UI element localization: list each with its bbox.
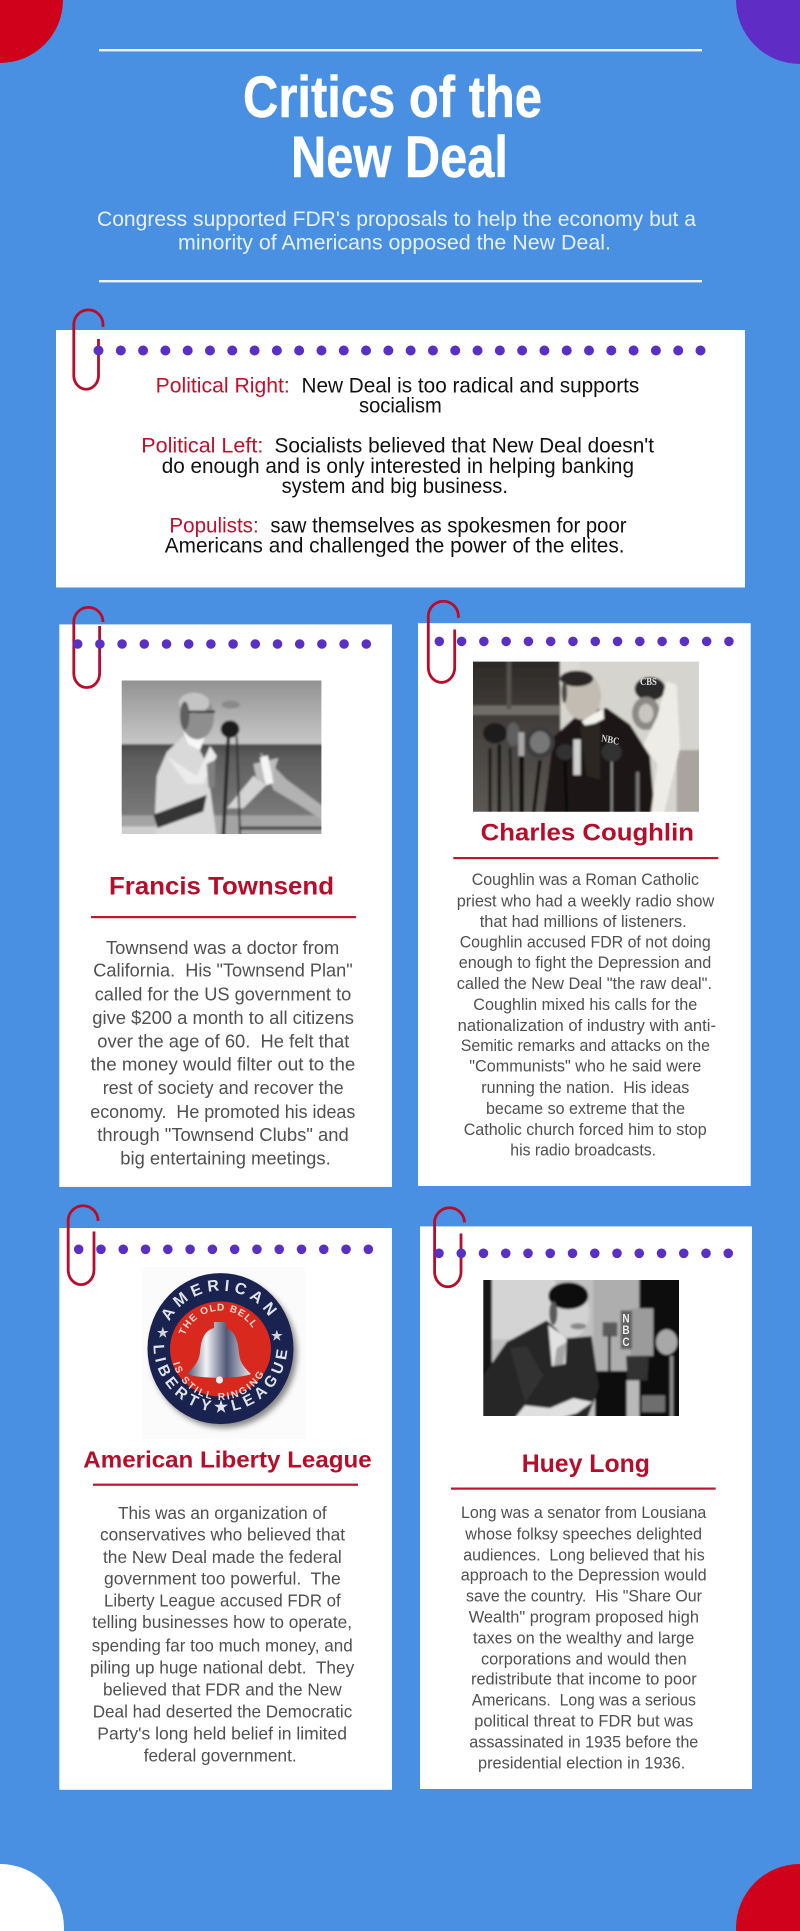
body text: audiences. Long believed that his	[463, 1546, 705, 1564]
title	[243, 65, 542, 190]
photo: Francis Townsend at microphone	[122, 680, 322, 834]
dotted line	[439, 1249, 729, 1258]
photo: Charles Coughlin at radio microphones: NBC	[600, 734, 620, 748]
corner circle: bottom right red	[736, 1864, 800, 1931]
body text: Wealth" program proposed high	[469, 1609, 699, 1627]
text: populists: Americans and challenged the power of the elites.	[165, 535, 625, 558]
heading rule	[451, 1488, 716, 1490]
body text: Coughlin was a Roman Catholic	[472, 871, 699, 889]
heading: Huey Long	[522, 1450, 650, 1478]
body text: telling businesses how to operate,	[92, 1612, 352, 1632]
body text	[90, 937, 355, 1168]
body text: enough to fight the Depression and	[459, 954, 711, 972]
body text: Long was a senator from Lousiana	[461, 1504, 707, 1522]
body text: Townsend was a doctor from	[106, 937, 339, 958]
image: American Liberty League badge: THE OLD BELL	[178, 1304, 256, 1334]
body text: over the age of 60. He felt that	[97, 1030, 349, 1052]
body text: assassinated in 1935 before the	[469, 1734, 698, 1752]
body text: that had millions of listeners.	[480, 913, 687, 931]
corner circle: top left red	[0, 0, 63, 63]
body text: Americans. Long was a serious	[472, 1692, 696, 1710]
icon: paper clip	[68, 1206, 98, 1285]
image: American Liberty League badge: AMERICAN	[162, 1280, 278, 1321]
body text: the money would filter out to the	[91, 1053, 355, 1074]
body text: the New Deal made the federal	[103, 1547, 342, 1567]
panel: political critics overview	[56, 310, 745, 588]
subtitle: Congress supported FDR's proposals to help the economy but a	[97, 208, 696, 231]
text: political left: system and big business.	[282, 475, 508, 498]
photo: Huey Long at NBC microphone: B	[622, 1324, 630, 1337]
text: populists: Populists:	[169, 515, 259, 538]
body text	[457, 871, 716, 1159]
subtitle: minority of Americans opposed the New Deal.	[178, 232, 611, 254]
text: populists	[165, 515, 627, 558]
icon: paper clip	[435, 1208, 464, 1287]
text: political left: do enough and is only interested in helping banking	[162, 455, 634, 478]
body text: spending far too much money, and	[92, 1635, 353, 1655]
body text: Liberty League accused FDR of	[104, 1590, 341, 1610]
body text: whose folksy speeches delighted	[464, 1526, 702, 1544]
body text: conservatives who believed that	[100, 1525, 345, 1545]
body text: save the country. His "Share Our	[466, 1588, 702, 1606]
heading rule	[453, 857, 718, 859]
panel: American Liberty League	[59, 1204, 392, 1790]
heading: Charles Coughlin	[481, 820, 694, 847]
body text: corporations and would then	[481, 1650, 687, 1668]
heading rule	[93, 1484, 358, 1486]
dotted line	[439, 637, 730, 646]
body text: Coughlin accused FDR of not doing	[460, 934, 711, 952]
dotted line	[79, 1245, 369, 1254]
body text: Coughlin mixed his calls for the	[473, 996, 697, 1014]
body text: called for the US government to	[95, 983, 351, 1004]
heading rule	[91, 916, 356, 918]
body text: became so extreme that the	[486, 1100, 685, 1118]
body text: political threat to FDR but was	[474, 1713, 693, 1731]
panel: Huey Long	[420, 1208, 752, 1789]
body text: give $200 a month to all citizens	[92, 1007, 354, 1028]
text: political right	[156, 375, 639, 418]
subtitle	[97, 208, 696, 254]
body text: Deal had deserted the Democratic	[93, 1702, 353, 1722]
body text: Party's long held belief in limited	[97, 1724, 347, 1744]
text: political left: Political Left:	[141, 435, 263, 458]
body text: Catholic church forced him to stop	[464, 1121, 707, 1139]
body text: approach to the Depression would	[461, 1567, 707, 1585]
body text: big entertaining meetings.	[120, 1148, 331, 1168]
body text: nationalization of industry with anti-	[458, 1017, 716, 1035]
dotted line	[78, 639, 367, 649]
title: New Deal	[291, 125, 508, 190]
photo: Charles Coughlin at radio microphones	[473, 662, 699, 812]
corner circle: top right purple	[736, 0, 800, 64]
photo: Huey Long at NBC microphone	[483, 1280, 679, 1416]
icon: paper clip	[74, 607, 103, 687]
body text: running the nation. His ideas	[481, 1079, 689, 1097]
body text: through "Townsend Clubs" and	[97, 1124, 349, 1145]
corner circle: bottom left white	[0, 1864, 64, 1931]
text: political left	[141, 435, 654, 498]
header rule bottom	[99, 280, 702, 282]
photo: Huey Long at NBC microphone: N	[622, 1313, 630, 1326]
photo: Huey Long at NBC microphone: C	[622, 1336, 630, 1349]
image: American Liberty League badge: ★	[271, 1328, 283, 1343]
body text: called the New Deal "the raw deal".	[457, 975, 712, 993]
body text: rest of society and recover the	[103, 1077, 344, 1098]
panel: Francis Townsend	[59, 607, 392, 1187]
body text: taxes on the wealthy and large	[473, 1630, 694, 1648]
photo: Charles Coughlin at radio microphones: CBS	[640, 677, 657, 688]
image: American Liberty League badge: LIBERTY★LEAGUE	[153, 1345, 288, 1413]
body text: Semitic remarks and attacks on the	[461, 1037, 710, 1055]
body text: government too powerful. The	[104, 1569, 341, 1589]
heading: Francis Townsend	[109, 872, 334, 900]
icon: paper clip	[428, 601, 458, 682]
body text	[461, 1504, 707, 1772]
image: American Liberty League badge: ★	[157, 1325, 169, 1340]
text: political right: New Deal is too radical and supports	[302, 375, 639, 398]
text: political left: Socialists believed that New Deal doesn't	[274, 435, 654, 458]
body text: economy. He promoted his ideas	[90, 1101, 355, 1122]
body text: priest who had a weekly radio show	[457, 892, 714, 910]
text: political right: socialism	[359, 394, 442, 418]
body text: federal government.	[144, 1745, 297, 1765]
body text: piling up huge national debt. They	[90, 1658, 355, 1678]
body text: "Communists" who he said were	[469, 1058, 701, 1076]
text: populists: saw themselves as spokesmen for poor	[270, 515, 626, 538]
dotted line	[98, 346, 701, 356]
image: American Liberty League badge: IS STILL RINGING	[173, 1362, 263, 1400]
body text: redistribute that income to poor	[471, 1671, 697, 1689]
body text: his radio broadcasts.	[510, 1141, 656, 1159]
heading: American Liberty League	[83, 1447, 372, 1473]
body text: California. His "Townsend Plan"	[93, 960, 353, 981]
body text: This was an organization of	[118, 1503, 327, 1523]
body text: presidential election in 1936.	[478, 1754, 685, 1772]
text: political right: Political Right:	[156, 375, 290, 398]
body text: believed that FDR and the New	[103, 1679, 342, 1699]
header rule top	[99, 49, 702, 51]
title: Critics of the	[243, 65, 542, 130]
panel: Charles Coughlin	[418, 601, 751, 1186]
body text	[90, 1503, 355, 1765]
image: American Liberty League badge	[146, 1273, 302, 1433]
icon: paper clip	[74, 310, 103, 389]
